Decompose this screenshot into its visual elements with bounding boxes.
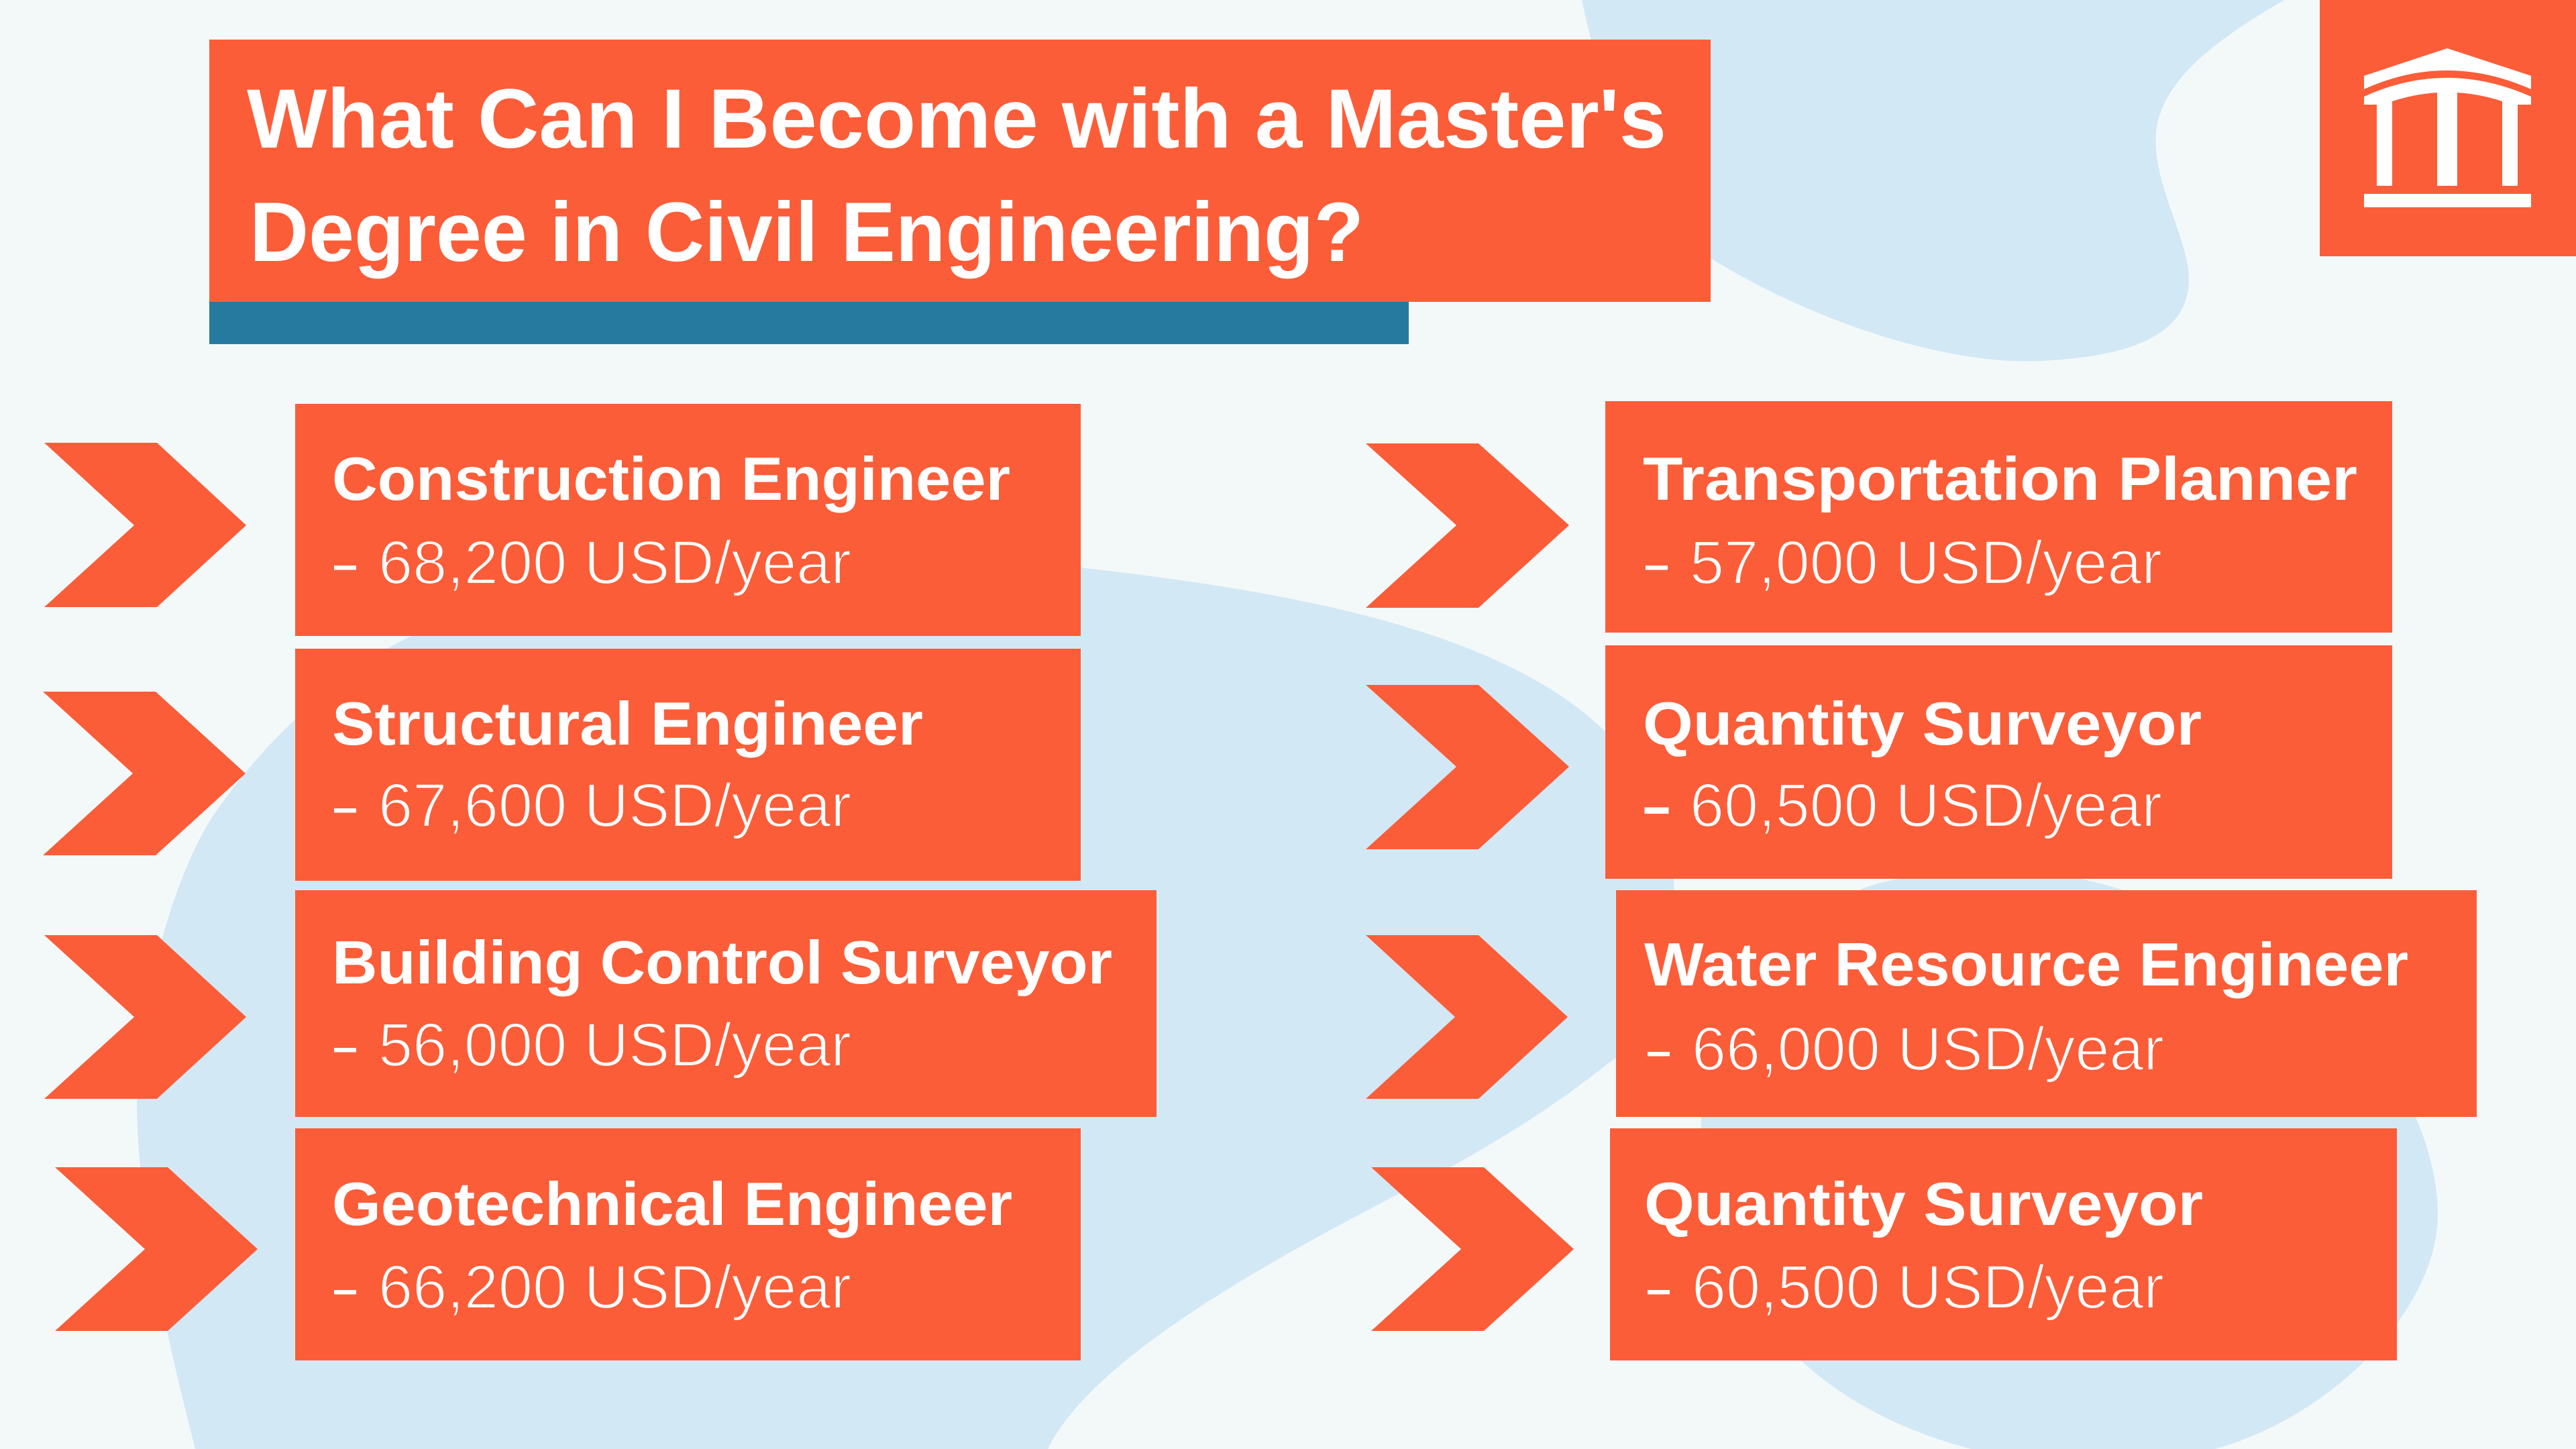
panel: Structural Engineer: – bbox=[333, 782, 358, 832]
background blob: bottom right bbox=[1701, 869, 2438, 1449]
panel: Quantity Surveyor (upper): 60,500 USD/year bbox=[1690, 771, 2162, 840]
title text: Degree in Civil Engineering? bbox=[250, 186, 1364, 279]
panel: Building Control Surveyor: 56,000 USD/year bbox=[378, 1011, 851, 1079]
arrow 5 bbox=[1366, 443, 1569, 608]
panel: Quantity Surveyor (lower) bbox=[1610, 1128, 2397, 1360]
panel: Water Resource Engineer: 66,000 USD/year bbox=[1692, 1015, 2164, 1083]
panel: Quantity Surveyor (upper): Quantity Surveyor bbox=[1643, 690, 2202, 758]
panel: Quantity Surveyor (lower): – bbox=[1646, 1264, 1671, 1313]
panel: Construction Engineer: 68,200 USD/year bbox=[378, 529, 851, 597]
title banner bbox=[209, 40, 1711, 344]
panel: Building Control Surveyor: Building Control Surveyor bbox=[332, 929, 1112, 997]
panel: Transportation Planner: – bbox=[1644, 539, 1669, 589]
arrow 3 bbox=[44, 935, 246, 1099]
arrow 8 bbox=[1371, 1167, 1574, 1331]
panel: Construction Engineer: – bbox=[333, 539, 358, 589]
icon: classical building bbox=[2320, 0, 2576, 256]
panel: Construction Engineer bbox=[295, 404, 1081, 636]
panel: Geotechnical Engineer: Geotechnical Engineer bbox=[332, 1171, 1012, 1238]
chevron arrows: left column bbox=[43, 443, 258, 1331]
panel: Transportation Planner: 57,000 USD/year bbox=[1690, 529, 2162, 597]
arrow 6 bbox=[1366, 685, 1569, 849]
panel: Geotechnical Engineer bbox=[295, 1128, 1081, 1360]
title text: What Can I Become with a Master's bbox=[247, 72, 1666, 166]
title background bbox=[209, 40, 1711, 302]
panel: Structural Engineer: 67,600 USD/year bbox=[378, 771, 851, 840]
title text bbox=[247, 72, 1666, 279]
background blob: top right bbox=[1582, 0, 2284, 362]
panel: Structural Engineer bbox=[295, 649, 1081, 881]
chevron arrows: right column bbox=[1366, 443, 1574, 1331]
panel: Geotechnical Engineer: 66,200 USD/year bbox=[378, 1253, 851, 1322]
panel: Building Control Surveyor: – bbox=[333, 1022, 358, 1071]
arrow 1 bbox=[44, 443, 246, 607]
panel: Building Control Surveyor bbox=[295, 890, 1157, 1117]
panel: Quantity Surveyor (lower): Quantity Surveyor bbox=[1644, 1171, 2203, 1238]
panel: Water Resource Engineer: Water Resource Engineer bbox=[1644, 931, 2408, 999]
panel: Geotechnical Engineer: – bbox=[333, 1264, 358, 1313]
panel: Structural Engineer: Structural Engineer bbox=[332, 690, 923, 758]
arrow 4 bbox=[55, 1167, 258, 1331]
arrow 2 bbox=[43, 692, 246, 855]
panel: Transportation Planner: Transportation Planner bbox=[1643, 445, 2357, 513]
panel: Water Resource Engineer: – bbox=[1646, 1026, 1671, 1075]
panel: Water Resource Engineer bbox=[1616, 890, 2477, 1117]
panel: Quantity Surveyor (upper) bbox=[1605, 645, 2392, 879]
panel: Quantity Surveyor (lower): 60,500 USD/year bbox=[1692, 1253, 2164, 1322]
title underline bar bbox=[209, 301, 1409, 344]
arrow 7 bbox=[1366, 935, 1568, 1099]
panel: Construction Engineer: Construction Engineer bbox=[332, 445, 1010, 513]
panel: Quantity Surveyor (upper): – bbox=[1644, 782, 1669, 832]
panel: Transportation Planner bbox=[1605, 401, 2392, 633]
background blob: bottom centre bbox=[137, 561, 1675, 1449]
